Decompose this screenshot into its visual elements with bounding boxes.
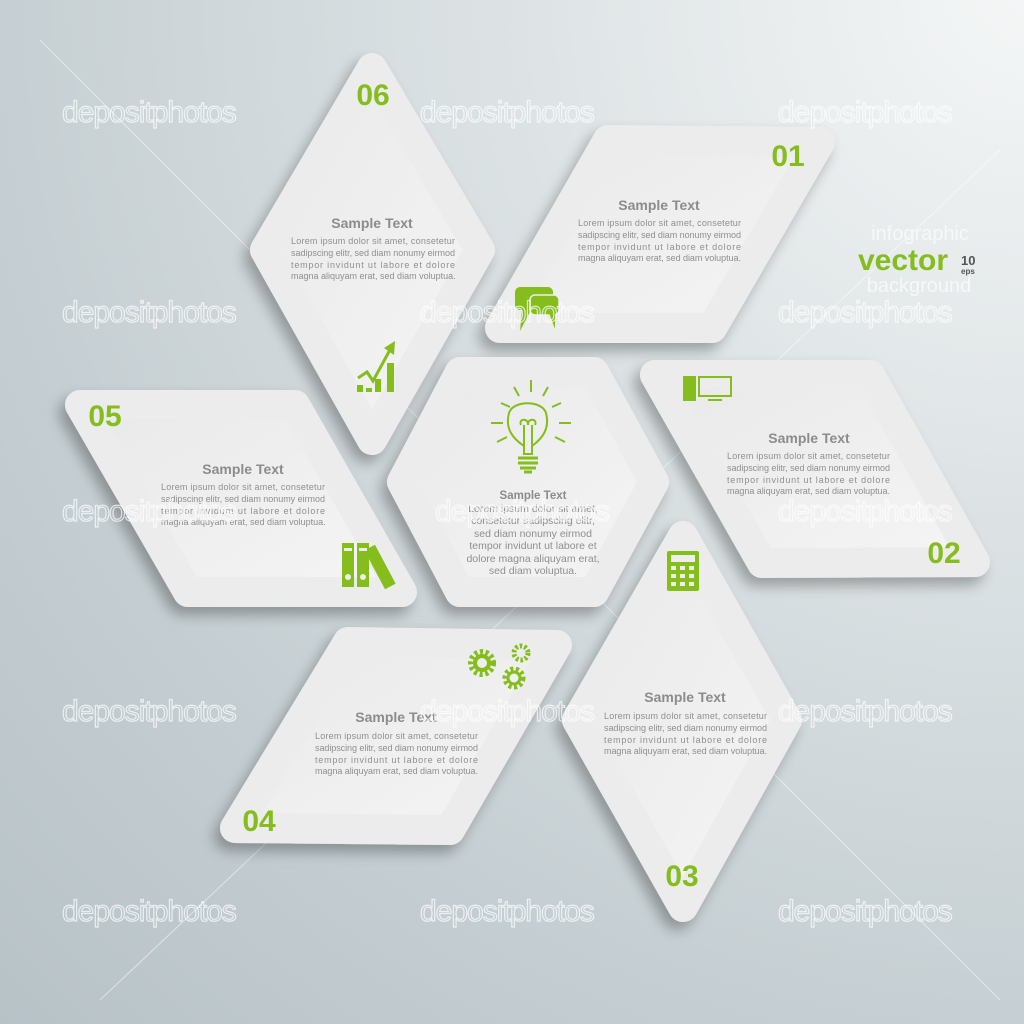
text 03	[604, 711, 767, 756]
icon: calculator	[667, 551, 699, 591]
panel 01	[500, 140, 820, 331]
heading 03: Sample Text	[644, 689, 726, 705]
side label: infographic vector: infographic	[871, 223, 969, 245]
watermarks: depositphotos	[435, 495, 609, 528]
icon: growth chart	[357, 341, 395, 392]
text 04: tempor invidunt ut labore et dolore	[315, 755, 478, 765]
side label: infographic vector: vector	[858, 244, 948, 277]
panel 03	[577, 536, 787, 907]
center hexagon	[402, 372, 654, 592]
text 04: sadipscing elitr, sed diam nonumy eirmod	[315, 743, 478, 753]
watermarks: depositphotos	[62, 495, 236, 528]
text 06	[291, 236, 456, 281]
panel 05	[80, 400, 402, 592]
text 06: tempor invidunt ut labore et dolore	[291, 260, 455, 270]
watermarks: depositphotos	[778, 296, 952, 329]
text 01: magna aliquyam erat, sed diam voluptua.	[578, 253, 741, 263]
text center: sed diam nonumy eirmod	[474, 528, 592, 540]
icon: binders	[342, 543, 396, 589]
panel 06	[265, 68, 480, 440]
text 04: Lorem ipsum dolor sit amet, consetetur	[315, 731, 478, 741]
text 03: magna aliquyam erat, sed diam voluptua.	[604, 746, 767, 756]
watermarks: depositphotos	[62, 895, 236, 928]
heading center: Sample Text	[500, 490, 567, 502]
heading 01: Sample Text	[618, 197, 700, 213]
heading 05: Sample Text	[202, 461, 284, 477]
side label: infographic vector: 10	[961, 253, 975, 268]
text center: tempor invidunt ut labore et	[469, 540, 597, 552]
icon: computer	[684, 377, 731, 400]
text center: sed diam voluptua.	[489, 565, 577, 577]
text 02: sadipscing elitr, sed diam nonumy eirmod	[727, 463, 890, 473]
text 02: Lorem ipsum dolor sit amet, consetetur	[727, 451, 890, 461]
text 05: sadipscing elitr, sed diam nonumy eirmod	[161, 494, 325, 504]
text 03: tempor invidunt ut labore et dolore	[604, 735, 767, 745]
side label: infographic vector	[858, 223, 975, 297]
text center: consetetur sadipscing elitr,	[471, 515, 595, 527]
number 06: 06	[356, 79, 390, 112]
watermarks: depositphotos	[420, 296, 594, 329]
watermarks: depositphotos	[778, 695, 952, 728]
text 05: tempor invidunt ut labore et dolore	[161, 506, 325, 516]
text 03: Lorem ipsum dolor sit amet, consetetur	[604, 711, 767, 721]
text 01: sadipscing elitr, sed diam nonumy eirmod	[578, 230, 741, 240]
text 06: sadipscing elitr, sed diam nonumy eirmod	[291, 248, 455, 258]
watermarks: depositphotos	[62, 695, 236, 728]
text 04	[315, 731, 478, 776]
number 02: 02	[927, 537, 961, 570]
text 06: Lorem ipsum dolor sit amet, consetetur	[291, 236, 455, 246]
text 02: magna aliquyam erat, sed diam voluptua.	[727, 486, 890, 496]
watermarks: depositphotos	[778, 495, 952, 528]
text center: Lorem ipsum dolor sit amet,	[468, 503, 598, 515]
watermarks: depositphotos	[778, 895, 952, 928]
watermarks	[62, 96, 952, 928]
text 01: tempor invidunt ut labore et dolore	[578, 242, 741, 252]
side label: infographic vector: background	[867, 275, 971, 297]
text 05: Lorem ipsum dolor sit amet, consetetur	[161, 482, 325, 492]
icon: speech bubbles	[515, 287, 559, 331]
number 05: 05	[88, 400, 122, 433]
text 04: magna aliquyam erat, sed diam voluptua.	[315, 766, 478, 776]
text 06: magna aliquyam erat, sed diam voluptua.	[291, 271, 456, 281]
text 01	[578, 218, 741, 263]
panel 04	[235, 642, 557, 838]
text center: dolore magna aliquyam erat,	[466, 553, 600, 565]
text 02: tempor invidunt ut labore et dolore	[727, 475, 890, 485]
number 03: 03	[665, 860, 699, 893]
watermarks: depositphotos	[62, 96, 236, 129]
number 01: 01	[771, 140, 805, 173]
text 01: Lorem ipsum dolor sit amet, consetetur	[578, 218, 741, 228]
heading 02: Sample Text	[768, 430, 850, 446]
text 02	[727, 451, 890, 496]
watermarks: depositphotos	[778, 96, 952, 129]
number 04: 04	[242, 805, 276, 838]
text center	[466, 503, 600, 577]
watermarks: depositphotos	[420, 96, 594, 129]
watermarks: depositphotos	[420, 695, 594, 728]
heading 06: Sample Text	[331, 215, 413, 231]
side label: infographic vector: eps	[961, 267, 975, 276]
icon: light bulb	[491, 380, 571, 472]
text 05	[161, 482, 326, 527]
heading 04: Sample Text	[355, 709, 437, 725]
icon: gears	[471, 646, 528, 687]
text 03: sadipscing elitr, sed diam nonumy eirmod	[604, 723, 767, 733]
text 05: magna aliquyam erat, sed diam voluptua.	[161, 517, 326, 527]
panel 02	[655, 375, 975, 570]
watermarks: depositphotos	[420, 895, 594, 928]
watermarks: depositphotos	[62, 296, 236, 329]
